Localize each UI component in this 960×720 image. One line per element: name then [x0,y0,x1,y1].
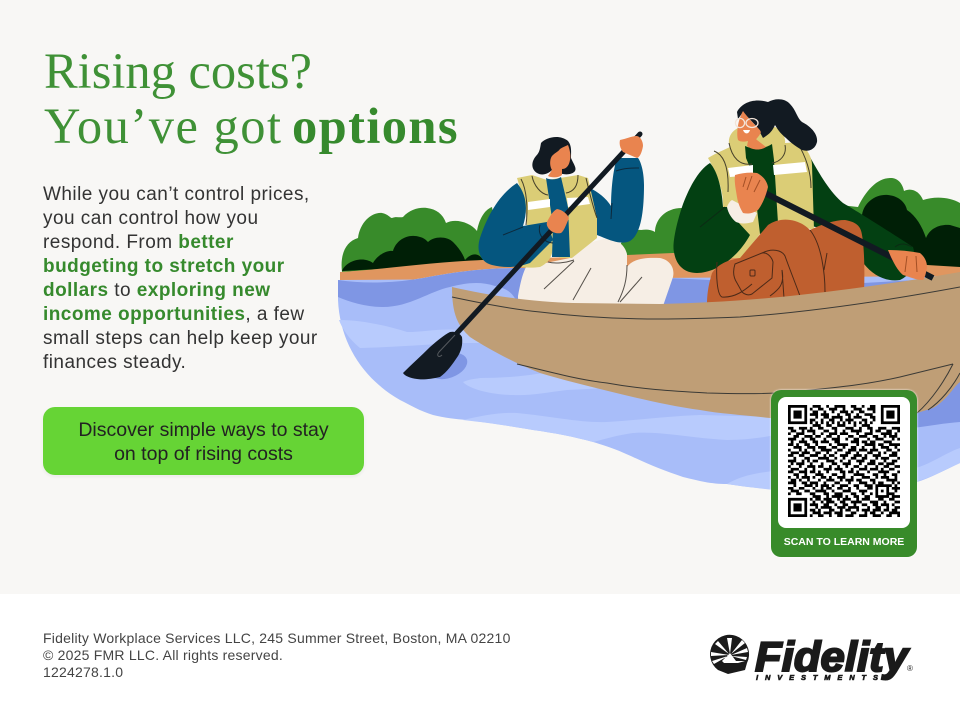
title: options [292,98,459,154]
bushes: background foliage [342,178,960,272]
legs [518,239,673,306]
right arm [806,157,914,280]
body text: dollars to exploring new [43,280,271,301]
left arm [478,183,553,267]
woman front: sitting figure [673,99,914,306]
glasses [735,118,758,128]
face [548,145,570,177]
canoe [452,272,960,418]
logo emblem [710,635,749,674]
hands front woman [727,173,927,280]
body text: respond. From better [43,232,234,253]
QR card [771,390,917,557]
QR code [788,405,900,517]
paddle rear [403,134,640,379]
footer text: © 2025 FMR LLC. All rights reserved. [43,647,283,663]
body text: income opportunities, a few [43,304,305,325]
ponytail and hair [737,99,817,151]
footer text: Fidelity Workplace Services LLC, 245 Summer Street, Boston, MA 02210 [43,630,511,646]
right arm [590,158,644,243]
river bank [340,253,960,283]
QR caption: SCAN TO LEARN MORE [784,536,904,548]
water [338,268,960,490]
body text [43,184,318,373]
hair [532,137,576,174]
body text: finances steady. [43,352,186,373]
life vest [708,127,814,258]
body text: small steps can help keep your [43,328,318,349]
call to action button: on top of rising costs [114,443,293,465]
Fidelity logo [710,633,913,682]
logo wordmark: Fidelity [755,633,911,680]
smile [743,130,750,133]
vest stripes [528,199,550,210]
pants [707,220,864,306]
paddle front [763,192,933,278]
body text: budgeting to stretch your [43,256,285,277]
body text: While you can’t control prices, [43,184,310,205]
body text: you can control how you [43,208,258,229]
life vest [515,175,597,268]
face [737,111,766,150]
turtleneck and sweater front [745,144,778,234]
footer text [43,630,511,680]
registered mark: ® [907,664,913,673]
logo subtitle: INVESTMENTS [756,673,878,682]
title [44,43,459,154]
vest stripes [728,165,753,177]
footer text: 1224278.1.0 [43,664,123,680]
woman rear: sitting figure [478,137,673,306]
call to action button: Discover simple ways to stay [78,419,329,441]
call to action button [43,407,364,475]
hands rear woman [547,136,643,233]
QR code panel [778,397,910,528]
title: Rising costs? [44,43,312,99]
title: You’ve got [44,98,283,154]
left arm [673,163,750,273]
shirt [546,177,570,257]
